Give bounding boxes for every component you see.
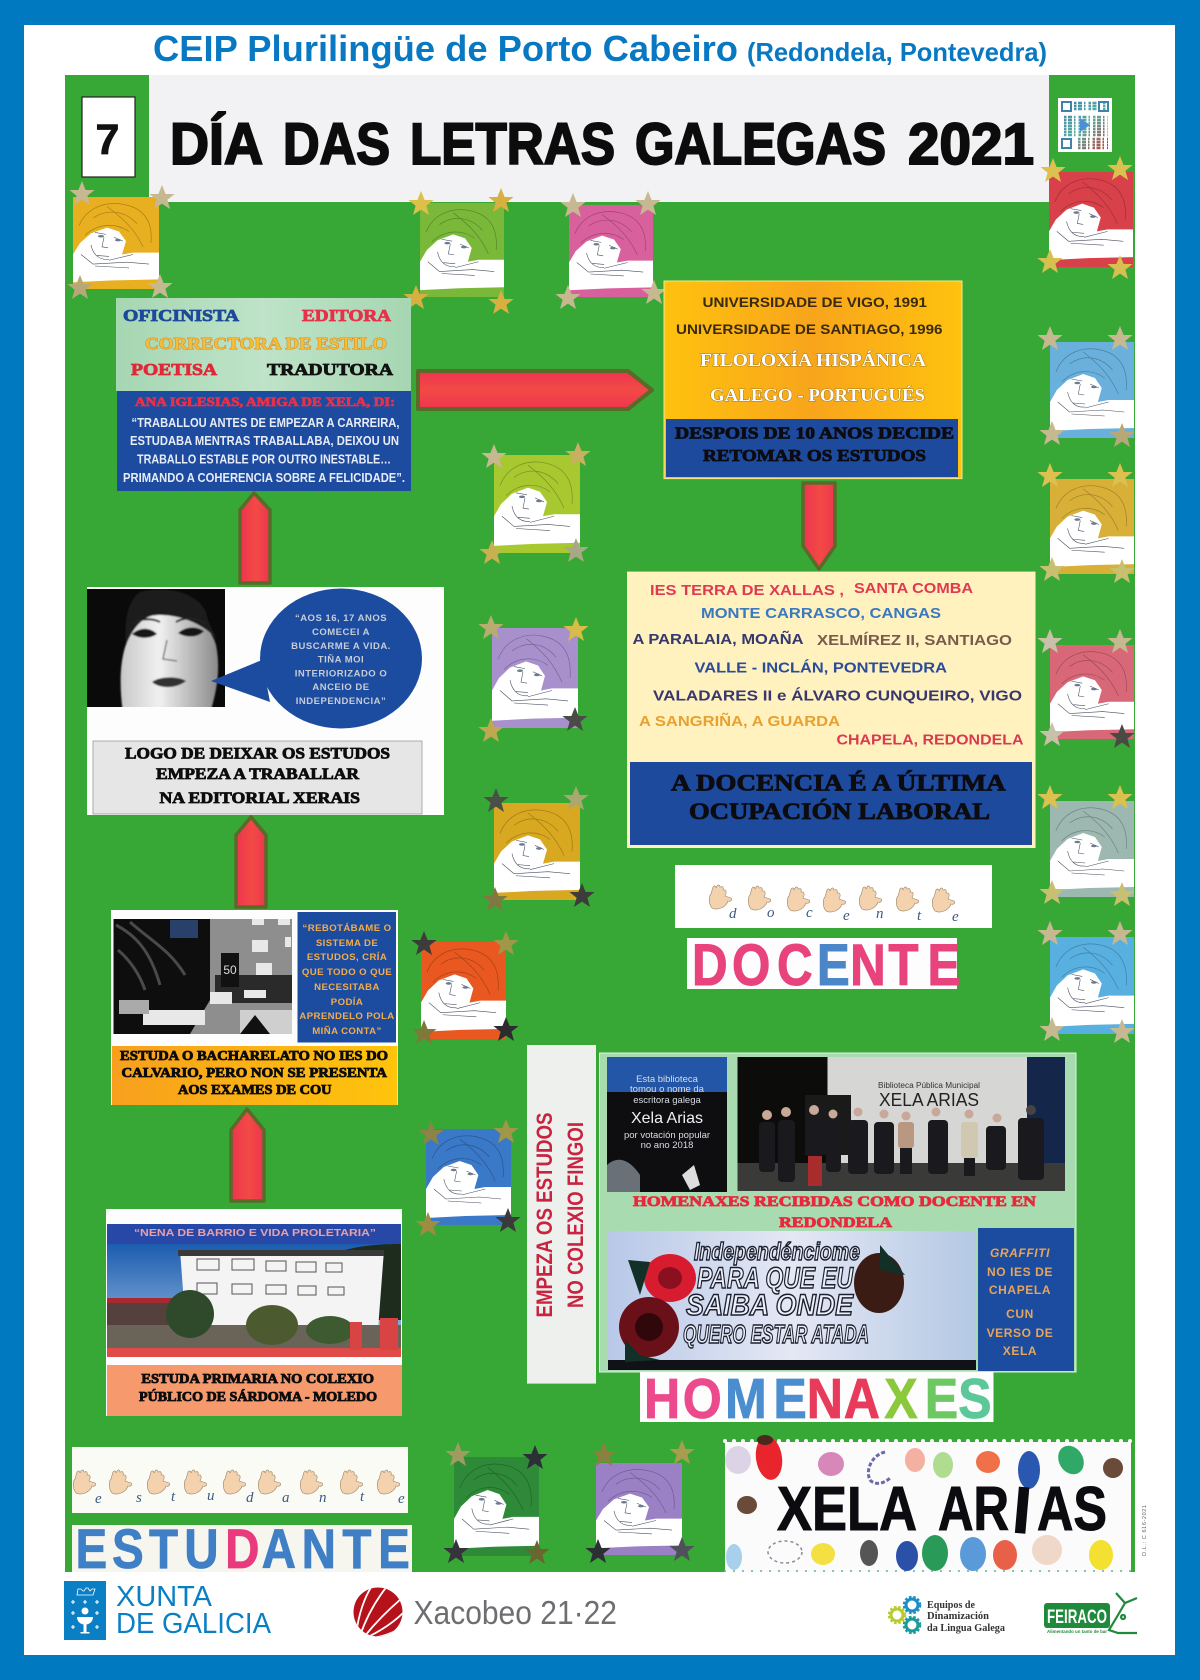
portrait card: lime (479, 442, 591, 564)
name: XELA (777, 1475, 917, 1544)
sign language strip: estudante: s (136, 1490, 142, 1506)
tribute heading: HOMENAXES RECIBIDAS COMO DOCENTE EN (633, 1194, 1036, 1210)
graffiti note box: XELA (1003, 1344, 1037, 1358)
word: DOCENTE: T (888, 933, 919, 998)
quote box: PODÍA (331, 996, 363, 1008)
grey caption box: EMPEZA A TRABALLAR (156, 766, 359, 783)
title text: GALEGAS (635, 112, 886, 177)
sign language strip: estudante: u (207, 1488, 214, 1504)
list of schools: VALLE - INCLÁN, PONTEVEDRA (694, 660, 947, 677)
occupations list: TRADUTORA (267, 360, 394, 379)
sign language strip: estudante: a (282, 1490, 290, 1506)
sign language strip: estudante: t (171, 1489, 176, 1505)
blue caption: DESPOIS DE 10 ANOS DECIDE (675, 423, 954, 442)
portrait card: mustard (1037, 463, 1135, 583)
word: HOMENAXES: M (725, 1367, 767, 1431)
sign language strip: estudante: t (360, 1489, 365, 1505)
word: DOCENTE: C (777, 933, 813, 998)
graffiti note box: GRAFFITI (990, 1246, 1050, 1260)
portrait card: yellow (67, 181, 175, 299)
grey caption box (93, 741, 422, 814)
portrait card: dark green (443, 1442, 550, 1564)
photo: graffiti wall: QUERO ESTAR ATADA (683, 1319, 869, 1349)
speech bubble quote: INDEPENDENCIA” (296, 696, 386, 707)
graffiti note box: NO IES DE (987, 1265, 1053, 1279)
sign language strip: docente (675, 865, 992, 928)
blue caption: RETOMAR OS ESTUDOS (703, 446, 926, 465)
panel: leaves school, works at Xerais (87, 587, 444, 815)
panel: Fingoi studies vertical label: EMPEZA OS ESTUDOS (532, 1112, 557, 1318)
word: HOMENAXES: H (644, 1367, 680, 1431)
quote box: MIÑA CONTA” (312, 1026, 382, 1037)
library plaque: Esta biblioteca (636, 1074, 699, 1085)
quote heading: ANA IGLESIAS, AMIGA DE XELA, DI: (135, 394, 395, 409)
logo: Xunta de Galicia: XUNTA (116, 1581, 213, 1613)
logo: Xunta de Galicia (64, 1581, 272, 1640)
portrait card: pink (555, 191, 667, 309)
quote box: “REBOTÁBAME O (303, 922, 392, 934)
portrait card: purple (585, 1440, 695, 1563)
word: ESTUDANTE: S (112, 1518, 144, 1581)
quote strip (107, 1224, 401, 1244)
caption: primaria: PÚBLICO DE SÁRDOMA - MOLEDO (139, 1389, 377, 1404)
list of schools (632, 580, 1024, 748)
word: DOCENTE: E (927, 933, 960, 998)
sign language strip: docente: d (729, 906, 737, 922)
word: HOMENAXES: S (958, 1367, 992, 1431)
list of schools: SANTA COMBA (854, 580, 973, 597)
title text (170, 112, 1034, 177)
card: Xela Arias with fingerprints (725, 1434, 1131, 1572)
right column of portrait cards (1037, 156, 1135, 1043)
list of schools: IES TERRA DE XALLAS , (650, 582, 844, 599)
word: HOMENAXES: O (683, 1367, 722, 1431)
quote box: ESTUDOS, CRÍA (307, 951, 387, 963)
legal deposit note: D.L.: C 616-2021 (1142, 1505, 1148, 1556)
graffiti note box (978, 1228, 1074, 1371)
word: ESTUDANTE: T (149, 1518, 178, 1581)
speech bubble quote: INTERIORIZADO O (295, 668, 387, 680)
occupations list (123, 306, 394, 379)
blue caption: OCUPACIÓN LABORAL (689, 798, 990, 824)
word: HOMENAXES: E (925, 1367, 958, 1431)
logo: Feiraco: Alimentando un tanto de bar (1047, 1629, 1107, 1634)
list of schools: XELMÍREZ II, SANTIAGO (817, 632, 1012, 649)
occupations list: POETISA (131, 360, 218, 379)
icon: QR code (1058, 98, 1112, 152)
title text: LETRAS (410, 112, 615, 177)
logo: Equipos de Dinamización: da Lingua Galega (927, 1623, 1006, 1634)
library plaque: escritora galega (633, 1095, 702, 1106)
sign language strip: docente: c (806, 905, 813, 921)
panel number 7 (82, 97, 135, 177)
speech bubble quote: TIÑA MOI (318, 654, 364, 666)
logo: Xunta de Galicia: DE GALICIA (116, 1608, 272, 1640)
logo: Equipos de Dinamización: Dinamización (927, 1611, 989, 1622)
photo: Xela Arias portrait (87, 589, 225, 720)
photo: IES do Calvario (114, 919, 292, 1034)
quote box: NECESITABA (314, 982, 380, 993)
occupations list: OFICINISTA (123, 306, 240, 325)
degree names: GALEGO - PORTUGUÉS (710, 384, 925, 405)
name: AR (938, 1475, 1009, 1544)
title banner (149, 75, 1049, 202)
sign language strip: docente: e (843, 908, 850, 924)
name: AS (1037, 1475, 1107, 1544)
quote box: SISTEMA DE (316, 938, 378, 949)
word: ESTUDANTE: E (76, 1518, 107, 1581)
quote box: QUE TODO O QUE (302, 967, 392, 978)
title text: 2021 (908, 112, 1034, 177)
title text: DAS (283, 112, 390, 177)
sign language strip: estudante: e (95, 1491, 102, 1507)
photo: school in Sárdoma (107, 1244, 401, 1357)
portrait card: green (403, 188, 514, 314)
logo: Equipos de Dinamización (889, 1597, 1006, 1634)
word: HOMENAXES: N (807, 1367, 843, 1431)
degree names: FILOLOXÍA HISPÁNICA (700, 349, 926, 370)
arrow: up to occupations (240, 493, 270, 583)
library plaque: no ano 2018 (641, 1140, 693, 1151)
panel: tributes (600, 1053, 1076, 1372)
logo: Equipos de Dinamización: Equipos de (927, 1600, 975, 1611)
fingerprints (725, 1434, 1123, 1571)
university list (676, 294, 943, 337)
sign language strip: estudante: n (319, 1490, 326, 1506)
library plaque: tomou o nome da (630, 1084, 705, 1095)
blue caption: A DOCENCIA É A ÚLTIMA (671, 770, 1006, 796)
photo: graffiti wall (608, 1231, 976, 1370)
list of schools: A SANGRIÑA, A GUARDA (639, 712, 840, 730)
speech bubble quote: ANCEIO DE (312, 682, 370, 693)
panel: IES do Calvario (111, 910, 398, 1105)
word: ESTUDANTE: D (225, 1518, 259, 1581)
quote strip: “NENA DE BARRIO E VIDA PROLETARIA” (134, 1227, 376, 1239)
list of schools: CHAPELA, REDONDELA (836, 732, 1024, 748)
panel: occupations and Ana Iglesias quote (116, 298, 411, 491)
speech bubble quote: BUSCARME A VIDA. (291, 641, 391, 652)
word: ESTUDANTE: N (302, 1518, 336, 1581)
sign language strip: docente: e (952, 909, 959, 925)
quote text: “TRABALLOU ANTES DE EMPEZAR A CARREIRA, (132, 415, 400, 430)
quote text: ESTUDABA MENTRAS TRABALLABA, DEIXOU UN (130, 433, 399, 448)
arrow: down (803, 483, 835, 569)
photo: graffiti wall: PARA QUE EU (697, 1262, 854, 1295)
occupations list: CORRECTORA DE ESTILO (145, 334, 387, 353)
photo: group at Biblioteca Xela Arias: XELA ARIAS (879, 1090, 979, 1110)
logo: Xacobeo 21-22 (354, 1588, 616, 1636)
sign language strip: estudante (72, 1447, 408, 1513)
quote text: PRIMANDO A COHERENCIA SOBRE A FELICIDADE”. (123, 470, 405, 485)
quote text (123, 415, 405, 485)
word: ESTUDANTE: E (378, 1518, 410, 1581)
caption: primaria: ESTUDA PRIMARIA NO COLEXIO (141, 1371, 374, 1386)
word: DOCENTE: N (850, 933, 886, 998)
tribute heading (633, 1194, 1036, 1231)
panel number 7: 7 (96, 116, 119, 164)
occupations list: EDITORA (302, 306, 392, 325)
quote box (298, 912, 396, 1042)
word: ESTUDANTE: T (342, 1518, 372, 1581)
portrait card: grey-green (1037, 785, 1135, 906)
school name heading: CEIP Plurilingüe de Porto Cabeiro (153, 28, 738, 69)
caption: bacharelato: CALVARIO, PERO NON SE PRESENTA (122, 1065, 387, 1080)
quote box: APRENDELO POLA (299, 1011, 395, 1022)
arrow: right (418, 371, 652, 409)
word: DOCENTE (687, 933, 960, 998)
panel: Fingoi studies vertical label: NO COLEXIO FINGOI (563, 1122, 588, 1308)
library plaque: por votación popular (624, 1130, 710, 1141)
word: DOCENTE: D (692, 933, 728, 998)
word: HOMENAXES: A (844, 1367, 880, 1431)
name (777, 1472, 1107, 1548)
word: HOMENAXES: E (773, 1367, 807, 1431)
photo: graffiti wall: SAIBA ONDE (686, 1289, 854, 1322)
photo: group at Biblioteca Xela Arias: Biblioteca Pública Municipal (878, 1081, 980, 1090)
arrow: up to bacharelato panel (231, 1109, 264, 1201)
portrait card: sky blue (1037, 326, 1135, 447)
green board (65, 75, 1135, 1572)
blue caption (630, 762, 1032, 845)
photo: IES do Calvario: 50 (223, 963, 237, 977)
list of schools: A PARALAIA, MOAÑA (632, 630, 804, 648)
speech bubble quote: “AOS 16, 17 ANOS (295, 613, 387, 624)
word: ESTUDANTE: A (262, 1518, 296, 1581)
portrait card: orange (411, 931, 519, 1044)
sign language strip: docente: t (917, 908, 922, 924)
school name heading: (Redondela, Pontevedra) (747, 37, 1047, 67)
panel: teaching schools (627, 572, 1036, 848)
caption: bacharelato: AOS EXAMES DE COU (178, 1082, 332, 1097)
sign language strip: estudante: d (246, 1490, 254, 1506)
caption: bacharelato: ESTUDA O BACHARELATO NO IES DO (120, 1048, 388, 1063)
sign language strip: docente: o (767, 905, 775, 921)
panel: primary school (106, 1209, 402, 1416)
photo: group at Biblioteca Xela Arias (738, 1057, 1065, 1191)
sign language strip: estudante: e (398, 1491, 405, 1507)
blue caption (666, 419, 958, 477)
portrait card: rose (1037, 629, 1135, 748)
graffiti note box: CUN (1006, 1307, 1034, 1321)
quote text: TRABALLO ESTABLE POR OUTRO INESTABLE… (137, 452, 391, 466)
panel: Fingoi studies vertical label (527, 1045, 596, 1384)
university list: UNIVERSIDADE DE SANTIAGO, 1996 (676, 321, 943, 337)
logo: Xacobeo 21-22: Xacobeo 21·22 (414, 1594, 617, 1631)
panel: university (664, 281, 962, 479)
library plaque (607, 1057, 727, 1192)
portrait card: blue (415, 1119, 521, 1236)
school name heading (153, 28, 1047, 69)
portrait card: red (1037, 156, 1133, 279)
caption: bacharelato (112, 1046, 398, 1105)
list of schools: VALADARES II e ÁLVARO CUNQUEIRO, VIGO (653, 688, 1022, 704)
graffiti note box: CHAPELA (989, 1283, 1051, 1297)
sign language strip: docente: n (876, 906, 884, 922)
logo: Feiraco (1044, 1593, 1137, 1634)
word: ESTUDANTE: U (184, 1518, 219, 1581)
name: I (1010, 1472, 1035, 1548)
word: DOCENTE: O (732, 933, 770, 998)
degree names (700, 349, 926, 405)
university list: UNIVERSIDADE DE VIGO, 1991 (702, 294, 927, 310)
photo: graffiti wall: Independénciome (694, 1238, 860, 1266)
arrow: up to work panel (236, 817, 266, 907)
word: HOMENAXES: X (884, 1367, 918, 1431)
tribute heading: REDONDELA (779, 1215, 892, 1231)
portrait card: light blue (1037, 921, 1135, 1043)
title text: DÍA (170, 112, 263, 177)
portrait card: violet (478, 615, 589, 742)
grey caption box: NA EDITORIAL XERAIS (160, 790, 360, 807)
speech bubble quote (211, 588, 422, 728)
portrait card: gold (482, 786, 595, 911)
logo: Feiraco: FEIRACO (1047, 1607, 1107, 1628)
caption: primaria (107, 1365, 402, 1416)
speech bubble quote: COMECEI A (312, 627, 370, 638)
word: ESTUDANTE (72, 1518, 412, 1581)
graffiti note box: VERSO DE (987, 1326, 1053, 1340)
grey caption box: LOGO DE DEIXAR OS ESTUDOS (125, 746, 390, 763)
list of schools: MONTE CARRASCO, CANGAS (701, 605, 941, 622)
word: DOCENTE: E (817, 933, 850, 998)
library plaque: Xela Arias (631, 1110, 703, 1127)
word: HOMENAXES (640, 1367, 994, 1431)
